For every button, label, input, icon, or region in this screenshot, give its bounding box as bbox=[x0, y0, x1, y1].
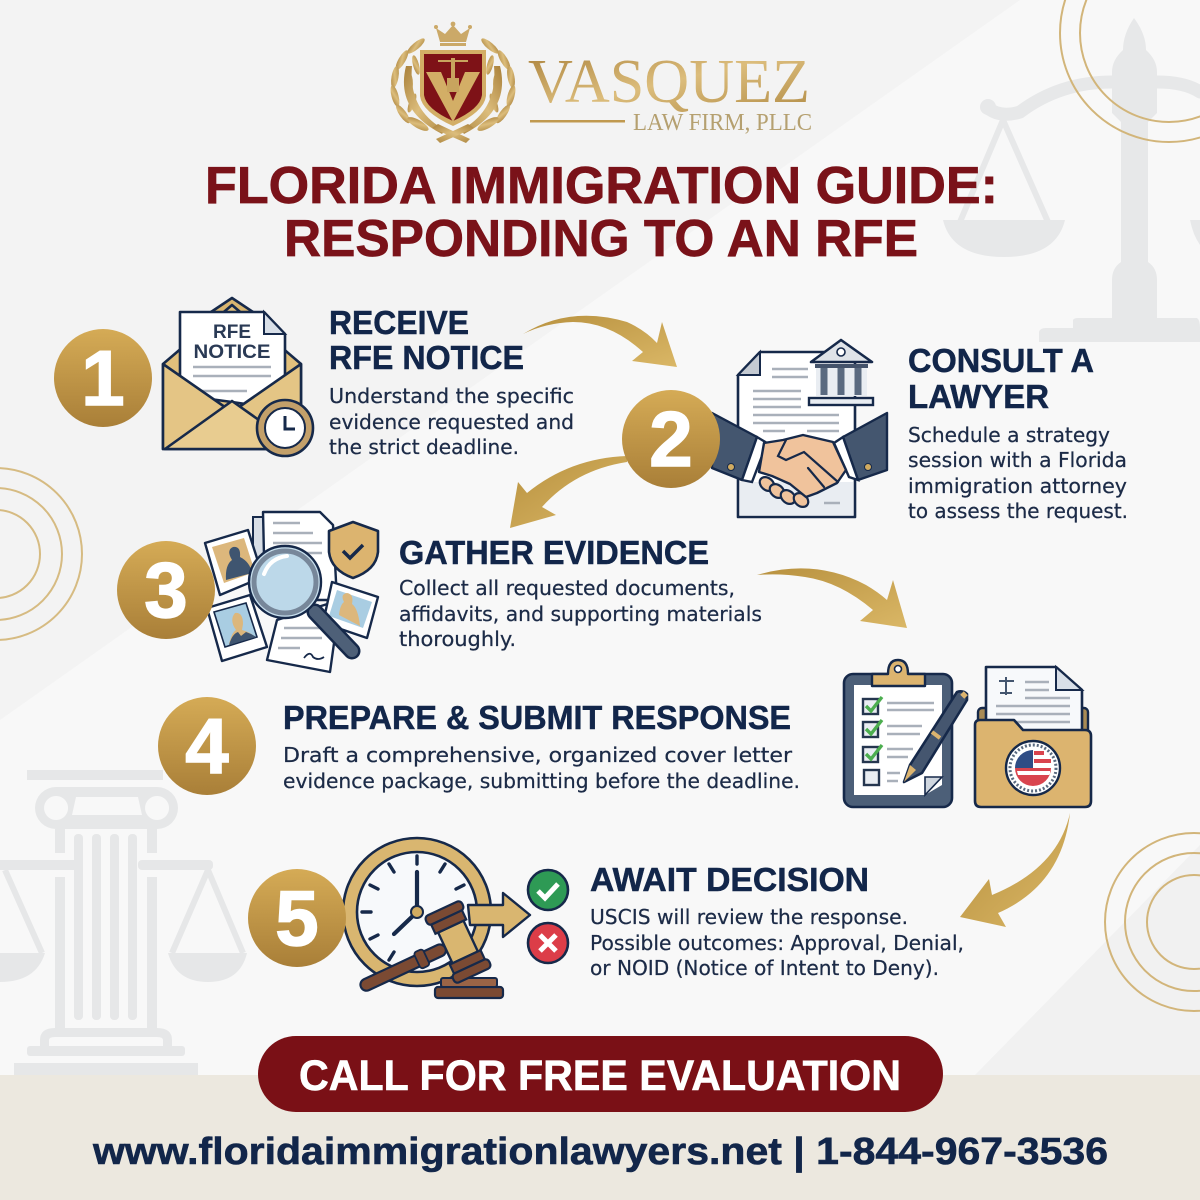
step 4 icon: folder with seal bbox=[975, 667, 1091, 807]
step 3 number badge bbox=[117, 541, 215, 639]
logo bbox=[389, 22, 812, 143]
step 2 icon: handshake and document bbox=[712, 340, 887, 517]
step 2 text: immigration attorney bbox=[908, 474, 1127, 498]
step 2 number badge bbox=[622, 390, 720, 488]
step 2 heading: CONSULT A bbox=[908, 342, 1094, 379]
logo crown bbox=[434, 22, 472, 46]
step 4 number badge bbox=[158, 697, 256, 795]
step 5 text: USCIS will review the response. bbox=[590, 905, 908, 929]
step 4 text: Draft a comprehensive, organized cover letter bbox=[283, 743, 793, 767]
logo subtitle: LAW FIRM, PLLC bbox=[633, 110, 812, 136]
step 1 heading: RECEIVE bbox=[329, 304, 469, 341]
step 4 text bbox=[283, 743, 800, 793]
arrow: step 4 to 5 bbox=[960, 813, 1070, 927]
step 3 bbox=[117, 512, 762, 672]
decor: gold rings top right bbox=[1060, 0, 1200, 142]
logo shield bbox=[420, 50, 486, 126]
step 1 text bbox=[329, 384, 574, 459]
step 5 heading: AWAIT DECISION bbox=[590, 861, 869, 898]
step 3 icon: documents, photos, magnifier, shield bbox=[205, 512, 378, 672]
step 1 number badge bbox=[54, 329, 152, 427]
step 1 text: Understand the specific bbox=[329, 384, 574, 408]
step 3 text: Collect all requested documents, bbox=[399, 576, 735, 600]
step 4 text: evidence package, submitting before the deadline. bbox=[283, 769, 800, 793]
title bbox=[205, 157, 998, 268]
step 1 icon: envelope with clock: RFE bbox=[213, 322, 251, 343]
step 4 heading: PREPARE & SUBMIT RESPONSE bbox=[283, 699, 791, 736]
step 3 text: affidavits, and supporting materials bbox=[399, 602, 762, 626]
step 4 icon: clipboard with checklist and pen bbox=[844, 660, 967, 807]
step 1 heading bbox=[329, 304, 524, 376]
step 1 icon: envelope with clock: NOTICE bbox=[194, 342, 270, 363]
step 5 number badge bbox=[248, 869, 346, 967]
step 3 text: thoroughly. bbox=[399, 627, 516, 651]
step 2 text: to assess the request. bbox=[908, 499, 1128, 523]
step 1 heading: RFE NOTICE bbox=[329, 339, 524, 376]
arrow: step 3 to 4 bbox=[757, 568, 907, 628]
logo wreath bbox=[389, 36, 517, 143]
step 1 number badge: 1 bbox=[81, 334, 125, 422]
step 3 text bbox=[399, 576, 762, 651]
step 1 text: evidence requested and bbox=[329, 410, 574, 434]
step 5 number badge: 5 bbox=[275, 874, 319, 962]
step 1 icon: envelope with clock bbox=[163, 298, 313, 456]
step 3 number badge: 3 bbox=[144, 546, 188, 634]
decor: scales of justice watermark bbox=[943, 18, 1200, 342]
title: FLORIDA IMMIGRATION GUIDE: bbox=[205, 157, 998, 215]
step 1 bbox=[54, 298, 574, 459]
logo wordmark: VASQUEZ bbox=[528, 48, 810, 116]
decor: column and scales watermark bbox=[0, 770, 247, 1075]
decor: gold rings left bbox=[0, 468, 82, 640]
step 2 text: Schedule a strategy bbox=[908, 423, 1110, 447]
call to action button: CALL FOR FREE EVALUATION bbox=[299, 1052, 901, 1100]
step 1 text: the strict deadline. bbox=[329, 435, 519, 459]
step 5 text: or NOID (Notice of Intent to Deny). bbox=[590, 956, 939, 980]
step 5 text: Possible outcomes: Approval, Denial, bbox=[590, 931, 964, 955]
step 5 icon: clock, gavel, outcomes bbox=[343, 838, 568, 1021]
title: RESPONDING TO AN RFE bbox=[284, 210, 918, 268]
step 2 text: session with a Florida bbox=[908, 448, 1127, 472]
arrow: step 1 to 2 bbox=[523, 316, 677, 367]
step 4 number badge: 4 bbox=[185, 702, 229, 790]
step 3 heading: GATHER EVIDENCE bbox=[399, 534, 709, 571]
step 2 heading bbox=[908, 342, 1094, 415]
step 5 bbox=[248, 838, 964, 1021]
step 2 heading: LAWYER bbox=[908, 378, 1049, 415]
step 5 text bbox=[590, 905, 964, 980]
call to action button bbox=[258, 1036, 943, 1112]
step 4 bbox=[158, 660, 1091, 807]
decor: gold rings right bbox=[1105, 833, 1200, 1011]
step 2 number badge: 2 bbox=[649, 395, 693, 483]
contact line: www.floridaimmigrationlawyers.net | 1-844-967-3536 bbox=[92, 1131, 1108, 1173]
step 2 text bbox=[908, 423, 1128, 523]
arrow: step 2 to 3 bbox=[510, 456, 627, 528]
step 2 bbox=[622, 340, 1128, 523]
